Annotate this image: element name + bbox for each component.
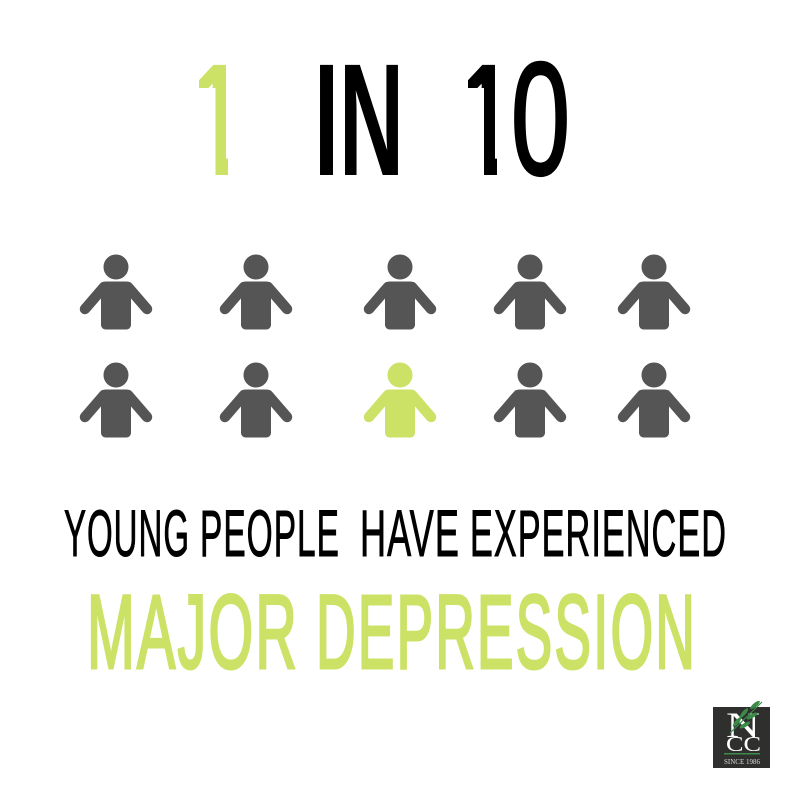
title: 1 in 10	[199, 60, 567, 178]
number 10: 0	[511, 29, 570, 208]
icon: person row 1 col 2	[225, 255, 287, 329]
word IN: IN	[314, 30, 404, 209]
logo: NCC since 1986: N	[726, 705, 760, 745]
icon: highlighted person	[369, 363, 431, 437]
text: young people have experienced: HAVE	[360, 496, 460, 570]
text: young people have experienced: YOUNG	[64, 496, 190, 570]
icon: person row 2 col 1	[85, 363, 147, 437]
logo: NCC since 1986: SINCE 1986	[724, 758, 760, 766]
icon: person row 2 col 4	[499, 363, 561, 437]
icon: person row 1 col 3	[369, 255, 431, 329]
logo: NCC since 1986	[713, 700, 770, 768]
icon: leaf branch	[730, 700, 762, 733]
text: young people have experienced	[64, 496, 727, 570]
text: major depression: MAJOR	[87, 574, 299, 691]
number 1: 1	[190, 30, 244, 209]
icon: person row 2 col 2	[225, 363, 287, 437]
pictogram: ten people, one highlighted	[85, 255, 685, 437]
logo: NCC since 1986: CC	[726, 732, 761, 756]
icon: person row 1 col 1	[85, 255, 147, 329]
text: major depression	[87, 574, 697, 691]
text: young people have experienced: PEOPLE	[200, 496, 340, 570]
icon: person row 1 col 4	[499, 255, 561, 329]
number 10	[468, 60, 567, 178]
icon: person row 1 col 5	[623, 255, 685, 329]
number 10: 1	[459, 30, 513, 209]
icon: person row 2 col 5	[623, 363, 685, 437]
